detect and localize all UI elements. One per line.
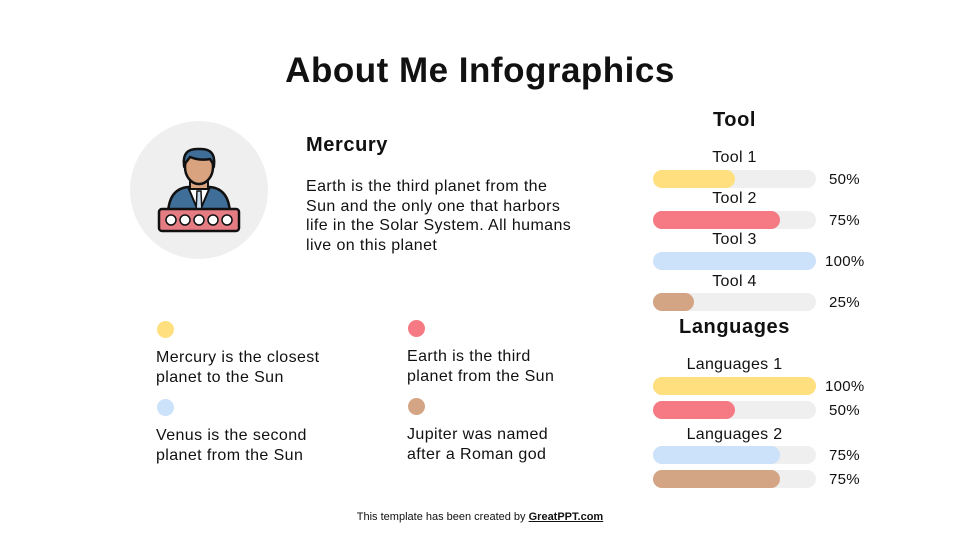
text: 100%	[825, 378, 865, 395]
text: 50%	[829, 402, 860, 419]
text: Tool 4	[712, 273, 757, 290]
item: tan: Jupiter was named after a Roman god	[407, 426, 548, 463]
text: 100%	[825, 253, 865, 270]
item: blue: Venus is the second planet from the Sun	[156, 427, 307, 464]
item: blue	[156, 399, 307, 464]
text: Languages 2	[687, 426, 782, 443]
heading: Tool: Tool	[713, 109, 756, 131]
text: 75%	[829, 212, 860, 229]
item: yellow: Mercury is the closest planet to the Sun	[156, 349, 320, 386]
heading: Mercury: Mercury	[306, 134, 388, 156]
title: About Me Infographics	[285, 51, 675, 90]
text: 75%	[829, 447, 860, 464]
heading: Languages: Languages	[679, 316, 790, 338]
language bars	[653, 356, 865, 488]
icon: person with rating	[130, 121, 268, 259]
item: red	[407, 320, 554, 385]
item: tan	[407, 398, 548, 463]
text: 50%	[829, 171, 860, 188]
text: Tool 1	[712, 149, 757, 166]
text: Languages 1	[687, 356, 782, 373]
tool bars	[653, 149, 865, 311]
footer: This template has been created by GreatPPT.com	[357, 511, 603, 523]
text: 25%	[829, 294, 860, 311]
item: yellow	[156, 321, 320, 386]
item: red: Earth is the third planet from the Sun	[407, 348, 554, 385]
text: Tool 3	[712, 231, 757, 248]
text: 75%	[829, 471, 860, 488]
text block: description: Earth is the third planet from the Sun and the only one that harbors life in the Solar System. All humans live on this planet	[306, 178, 571, 254]
text: Tool 2	[712, 190, 757, 207]
